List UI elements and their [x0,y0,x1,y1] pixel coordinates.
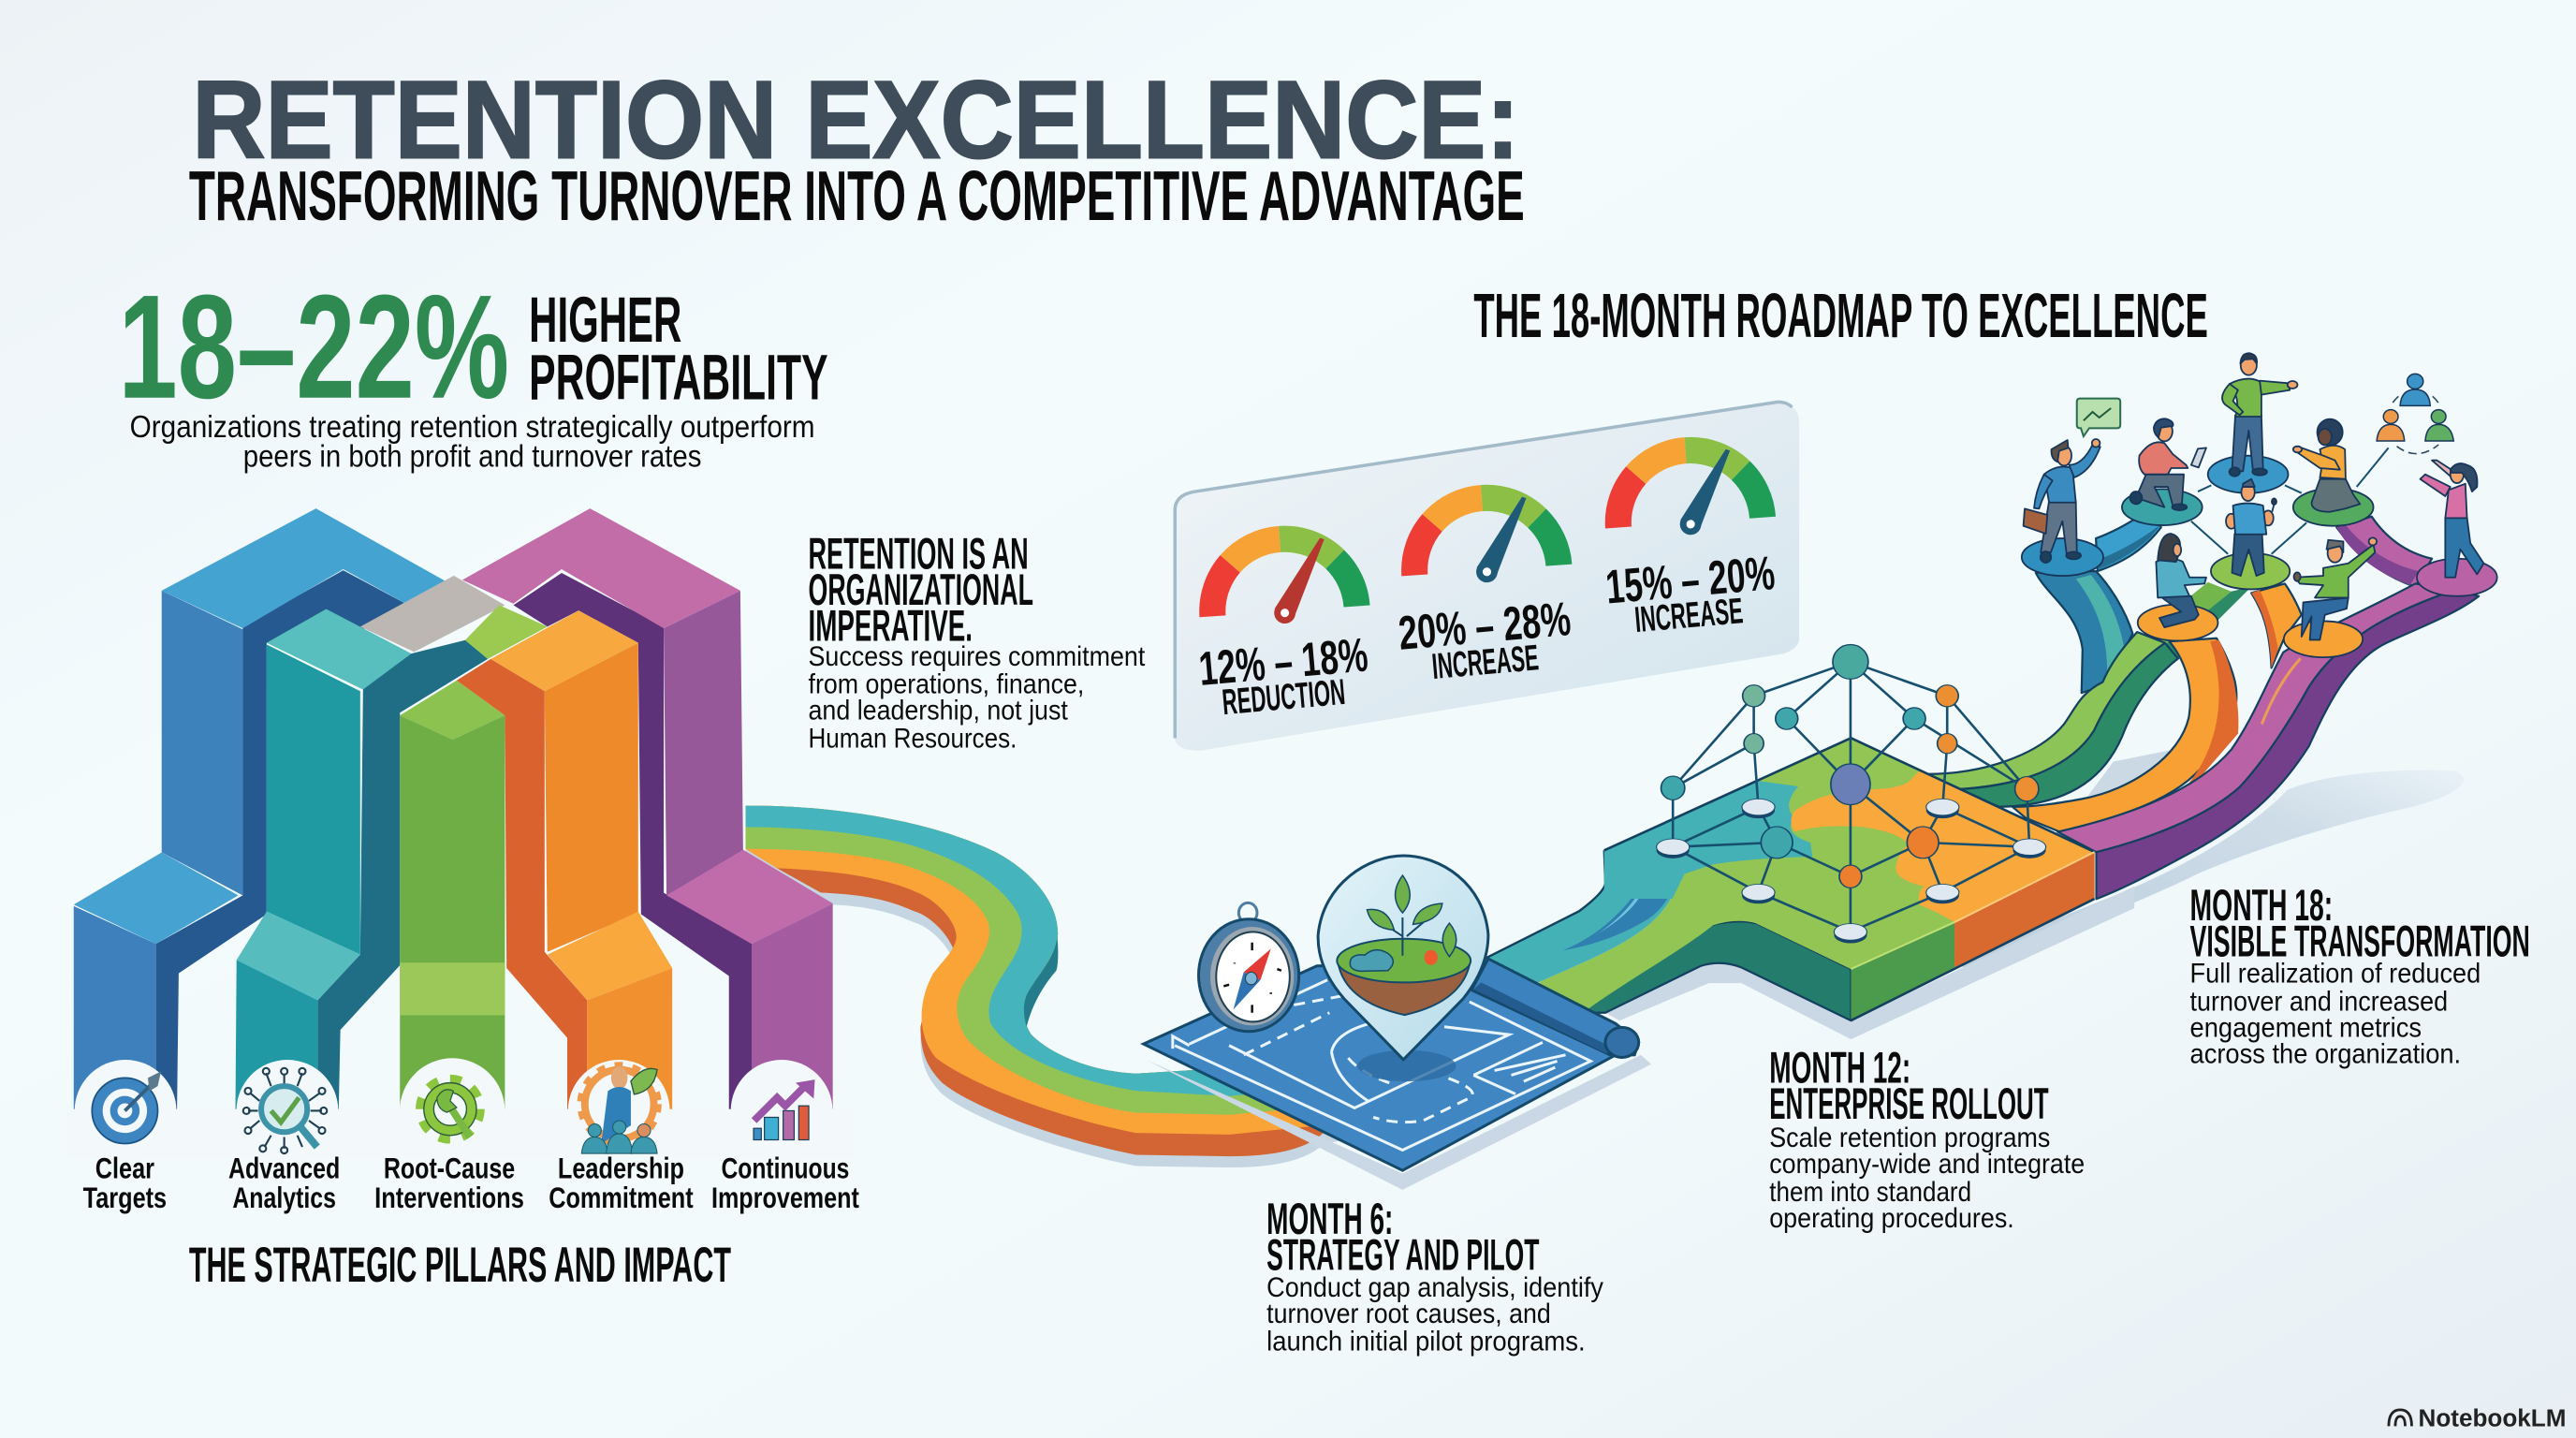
pillars graphic [74,508,833,1110]
stream: purple main [2057,583,2479,899]
stream: blue connector [2096,506,2161,571]
gauge 2 value: 20% – 28% [1397,592,1573,660]
label: clear targets: Clear [95,1151,154,1184]
icon: chart speech bubble [2077,399,2120,436]
label: root-cause interventions: Root-Cause [384,1151,515,1184]
road fold [1563,873,1676,950]
headline statistic [118,265,828,474]
icon: growth chart [754,1079,815,1140]
milestone: month 12: Scale retention programs [1769,1123,2050,1153]
gauge 1 caption: REDUCTION [1221,672,1347,723]
blueprint roll [1471,959,1639,1057]
people on discs [2022,353,2497,657]
stream shadows on ground [1956,749,2464,971]
platform side faces [1851,852,2095,1020]
label: clear targets [83,1151,167,1214]
pillar: teal [236,609,488,1110]
icon: gear and wrench [419,1078,480,1139]
subtitle: TRANSFORMING TURNOVER INTO A COMPETITIVE ADVANTAGE [189,156,1525,235]
gauge 3 value: 15% – 20% [1603,546,1777,614]
icon: team triad [2377,374,2453,454]
center standing person [2226,479,2276,576]
kneeling person in orange [2293,419,2360,512]
gauge 1 value: 12% – 18% [1196,627,1369,696]
label: leadership commitment [549,1151,694,1214]
stat description: peers in both profit and turnover rates [243,439,701,474]
label: advanced analytics: Advanced [228,1151,340,1184]
lower stream segments [1926,583,2479,899]
milestone: month 12: MONTH 12: [1769,1044,1910,1093]
milestone: month 18: turnover and increased [2190,986,2448,1017]
stream: orange upper [2251,583,2302,668]
network sphere nodes [1661,645,2039,888]
milestone: month 12: ENTERPRISE ROLLOUT [1769,1079,2049,1129]
label: advanced analytics [228,1151,340,1214]
imperative text block [809,529,1146,755]
location pin terrarium [1318,856,1488,1060]
stat label line 2: PROFITABILITY [529,341,828,413]
gauge 3 [1614,446,1764,540]
label: continuous improvement: Continuous [721,1151,849,1184]
upper stream segments [2036,506,2432,693]
gauge 1 [1208,534,1357,628]
road green surface [1529,836,1954,1011]
pillar junction: grey block [360,576,505,652]
imperative text block: and leadership, not just [809,696,1068,726]
standing person in green [2222,353,2297,477]
panel background [1175,402,1799,751]
label: continuous improvement [711,1151,859,1214]
label: leadership commitment: Commitment [549,1181,694,1214]
imperative text block: IMPERATIVE. [809,601,973,651]
flowing ribbon from pillars to blueprint [746,806,1339,1167]
label: continuous improvement: Improvement [711,1181,859,1214]
pillar: orange [457,610,672,1110]
milestone: month 6 [1266,1195,1603,1357]
discs [2022,456,2497,657]
icon arches [66,1058,855,1164]
stat description: Organizations treating retention strategically outperform [130,410,815,445]
road and enterprise platform [1473,738,2134,1039]
blueprint and markers [1144,856,1651,1190]
imperative text block: RETENTION IS AN [809,529,1029,579]
seated person in green [2294,537,2377,639]
milestone: month 18: Full realization of reduced [2190,959,2481,990]
pillar: green [400,681,505,1110]
road teal surface [1473,805,1790,995]
milestone: month 6: STRATEGY AND PILOT [1266,1231,1540,1281]
icon: target [92,1071,161,1144]
icon: leadership [580,1064,659,1153]
pillar labels [83,1151,859,1214]
seated person in teal [2156,534,2206,627]
milestone: month 18 [2190,881,2530,1070]
kneeling person with tablet [2130,418,2206,510]
label: clear targets: Targets [83,1181,167,1214]
network lines [1673,662,2029,932]
milestone: month 12: operating procedures. [1769,1203,2014,1234]
stat label line 1: HIGHER [529,284,681,356]
platform top surface [1604,738,2095,969]
platform shadow [1605,887,2134,1039]
stream: green main [1926,632,2178,807]
gauge 2 caption: INCREASE [1430,638,1540,687]
imperative text block: from operations, finance, [809,669,1084,700]
person with briefcase [2024,439,2100,563]
pillar junction: lime block [465,605,548,659]
pillars heading: THE STRATEGIC PILLARS AND IMPACT [189,1238,731,1293]
gauge 2 [1410,493,1559,588]
stream: purple connector [2336,517,2432,587]
label: root-cause interventions [374,1151,524,1214]
label: advanced analytics: Analytics [232,1181,336,1214]
road top outline [1473,850,1605,964]
network on platform [1657,645,2046,943]
imperative text block: ORGANIZATIONAL [809,565,1033,615]
blueprint sheet [1144,962,1616,1170]
imperative text block: Human Resources. [809,724,1017,755]
milestone: month 18: engagement metrics [2190,1012,2422,1043]
imperative text block: Success requires commitment [809,641,1146,672]
pillar: purple [462,508,833,1110]
person in pink [2421,461,2483,578]
milestone: month 12 [1769,1044,2085,1234]
KPI gauge panel [1175,402,1799,751]
milestone: month 6: Conduct gap analysis, identify [1266,1272,1603,1303]
connector lines between discs [2191,448,2389,554]
big number: 18–22% [118,265,509,430]
milestone: month 12: them into standard [1769,1177,1971,1208]
road dark wall [1575,921,1851,1020]
network flat nodes [1657,799,2046,943]
stream: blue descending [2036,571,2132,693]
gauge 3 caption: INCREASE [1633,591,1745,640]
milestone: month 12: company-wide and integrate [1769,1149,2085,1180]
blueprint shadow [1146,1055,1651,1190]
stat description [130,410,815,474]
milestone: month 6: turnover root causes, and [1266,1299,1551,1329]
compass [1198,902,1299,1032]
watermark: NotebookLM [2419,1403,2566,1431]
milestone: month 6: MONTH 6: [1266,1195,1393,1244]
milestone: month 18: MONTH 18: [2190,881,2333,931]
stream: orange main [2012,638,2238,832]
title: RETENTION EXCELLENCE: [192,58,1519,181]
icon: analytics [243,1068,327,1153]
milestone: month 6: launch initial pilot programs. [1266,1327,1586,1357]
label: leadership commitment: Leadership [558,1151,684,1184]
pillar: blue [74,508,446,1110]
stream: green upper [2146,582,2251,660]
label: root-cause interventions: Interventions [374,1181,524,1214]
milestone: month 18: across the organization. [2190,1039,2461,1070]
